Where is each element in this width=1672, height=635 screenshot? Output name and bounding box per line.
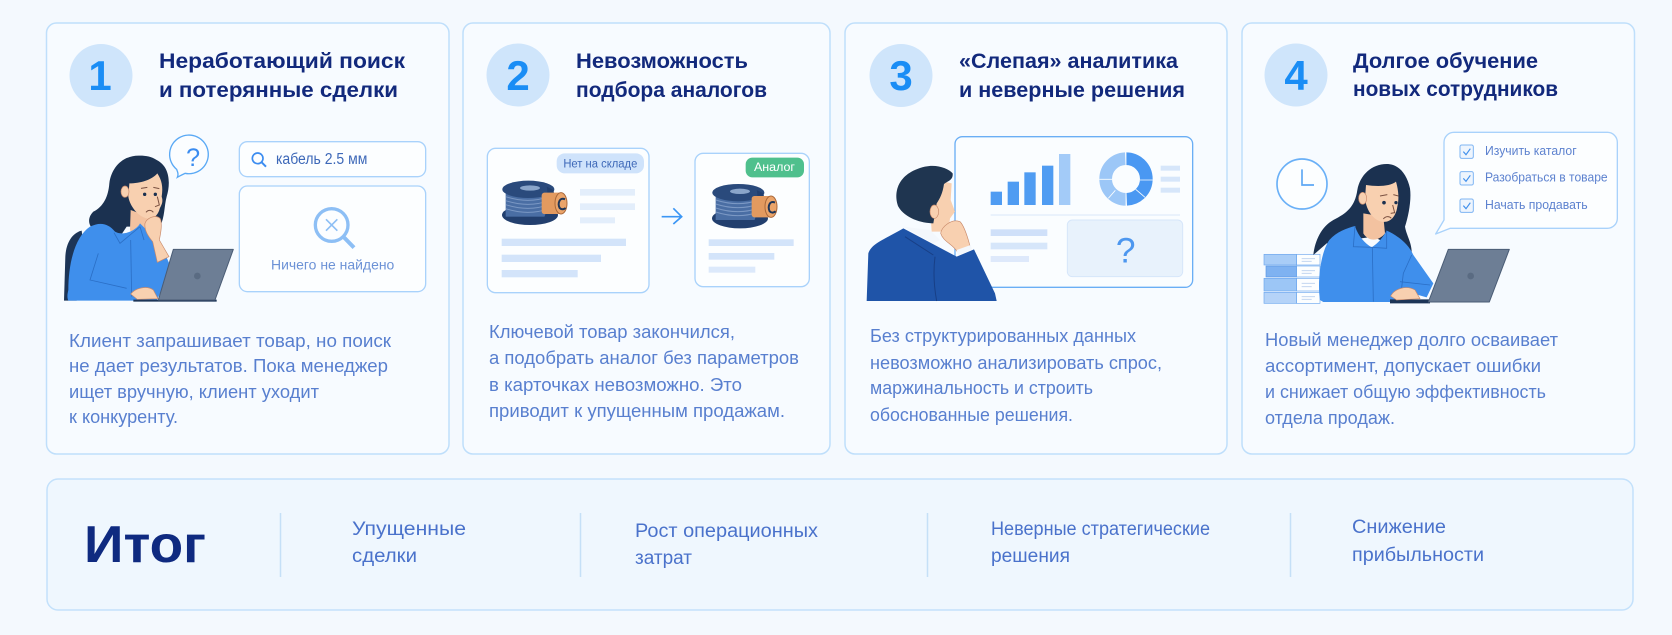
description 2: в карточках невозможно. Это [489, 374, 742, 395]
heading 2: Невозможность [576, 49, 748, 73]
panel: summary [47, 479, 1633, 610]
heading 1: и потерянные сделки [159, 78, 398, 102]
outcome: wrong decisions: решения [991, 546, 1070, 567]
outcome: lost deals: сделки [352, 546, 417, 567]
checklist bubble: Разобраться в товаре [1485, 170, 1608, 185]
description 2: а подобрать аналог без параметров [489, 347, 799, 368]
icon: stack of books [1264, 254, 1320, 303]
number badge 1: 1 [88, 52, 112, 99]
description 3 [870, 325, 1162, 425]
outcome: lower profit [1352, 517, 1484, 566]
bar chart [991, 154, 1070, 205]
description 1: к конкуренту. [69, 406, 178, 427]
number badge 1 [70, 44, 132, 107]
number badge 2: 2 [506, 52, 530, 99]
product card: analog: Аналог [754, 160, 795, 174]
empty results box: Ничего не найдено [271, 256, 395, 272]
heading 1 [159, 49, 405, 102]
number badge 4 [1264, 44, 1328, 106]
analytics dashboard: ? [1116, 232, 1135, 271]
heading 2: подбора аналогов [576, 78, 767, 102]
description 4: Новый менеджер долго осваивает [1265, 329, 1559, 350]
icon: thinking man [867, 166, 997, 301]
heading 4: новых сотрудников [1353, 77, 1558, 101]
outcome: lower profit: Снижение [1352, 517, 1446, 538]
heading 4: Долгое обучение [1353, 49, 1538, 73]
description 2: приводит к упущенным продажам. [489, 400, 785, 421]
empty results box [239, 186, 426, 292]
product card: analog [695, 153, 809, 287]
product card: out of stock [487, 148, 649, 293]
icon: question bubble: ? [186, 144, 200, 172]
panel: problem 2 [463, 23, 830, 454]
number badge 4: 4 [1284, 52, 1308, 99]
description 4: отдела продаж. [1265, 407, 1395, 428]
outcome: rising costs: Рост операционных [635, 521, 819, 542]
search box [239, 142, 426, 177]
illustration: dashboard and thinking man [867, 137, 1193, 301]
icon: woman at laptop [1313, 164, 1509, 303]
search box: кабель 2.5 мм [276, 151, 367, 168]
analytics dashboard [955, 137, 1193, 287]
panel: problem 4 [1242, 23, 1634, 454]
outcome: rising costs [635, 521, 819, 569]
description 3: Без структурированных данных [870, 325, 1137, 346]
panel: problem 1 [46, 23, 449, 454]
checklist bubble: Изучить каталог [1485, 143, 1577, 158]
donut chart [1099, 152, 1153, 206]
description 3: обоснованные решения. [870, 404, 1073, 425]
number badge 2 [486, 44, 550, 106]
summary heading: Итог [84, 516, 206, 574]
description 1: ищет вручную, клиент уходит [69, 381, 320, 402]
description 2 [489, 321, 799, 421]
description 4 [1265, 329, 1559, 428]
panel: problem 3 [845, 23, 1227, 454]
number badge 3: 3 [889, 52, 913, 99]
outcome: lower profit: прибыльности [1352, 545, 1484, 566]
outcome: lost deals [352, 519, 466, 567]
outcome: wrong decisions [991, 519, 1210, 567]
heading 2 [576, 49, 767, 102]
heading 4 [1353, 49, 1558, 101]
heading 3: «Слепая» аналитика [959, 49, 1179, 73]
heading 3: и неверные решения [959, 78, 1185, 102]
description 2: Ключевой товар закончился, [489, 321, 735, 342]
number badge 3 [870, 44, 932, 107]
checklist bubble: Начать продавать [1485, 197, 1588, 212]
product card: out of stock: Нет на складе [563, 157, 637, 171]
description 3: невозможно анализировать спрос, [870, 352, 1162, 373]
icon: question bubble [170, 135, 208, 177]
arrow [662, 208, 682, 224]
illustration: out of stock product and analog [487, 148, 809, 293]
description 4: ассортимент, допускает ошибки [1265, 355, 1541, 376]
heading 1: Неработающий поиск [159, 49, 405, 73]
icon: woman at laptop [64, 156, 233, 301]
outcome: lost deals: Упущенные [352, 519, 466, 540]
outcome: rising costs: затрат [635, 548, 692, 569]
illustration: new employee learning [1264, 132, 1617, 303]
heading 3 [959, 49, 1185, 102]
description 1 [69, 330, 392, 427]
illustration: woman searching and empty result [64, 135, 426, 301]
description 1: не дает результатов. Пока менеджер [69, 355, 388, 376]
description 3: маржинальность и строить [870, 377, 1093, 398]
icon: clock [1277, 159, 1327, 209]
checklist bubble [1436, 132, 1617, 234]
description 4: и снижает общую эффективность [1265, 381, 1546, 402]
outcome: wrong decisions: Неверные стратегические [991, 519, 1210, 540]
description 1: Клиент запрашивает товар, но поиск [69, 330, 392, 351]
